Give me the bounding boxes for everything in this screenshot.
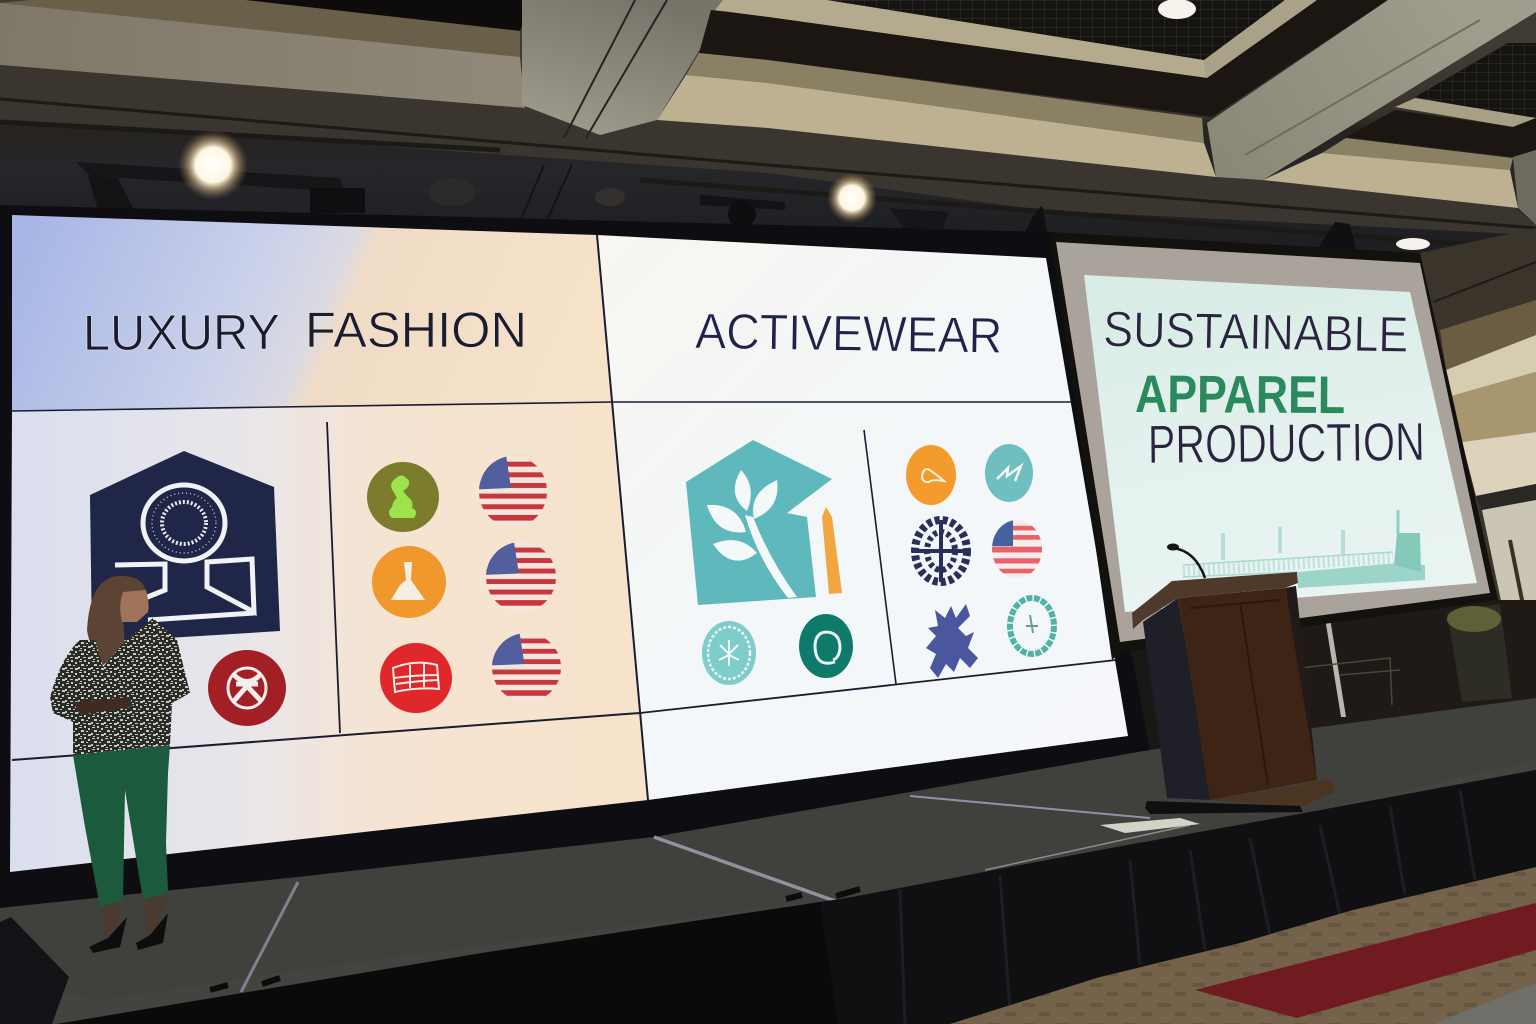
- heading: activewear: ACTIVEWEAR: [695, 303, 1003, 364]
- icon: navy house logo: [90, 451, 280, 642]
- ceiling: [0, 0, 1536, 262]
- face: [120, 590, 149, 622]
- slide skyline illustration: [1183, 510, 1425, 588]
- hair: [87, 576, 146, 665]
- icon: flag circle 3: [492, 633, 561, 702]
- icon: teal ring seal: [1010, 598, 1054, 654]
- slide heading: APPAREL: [1135, 365, 1345, 425]
- ceiling lights: [178, 0, 1460, 339]
- shoes: [89, 913, 168, 953]
- icon: red emblem: [208, 650, 286, 726]
- foreground speaker box: [0, 917, 69, 1024]
- slide heading: PRODUCTION: [1147, 412, 1425, 475]
- trousers: [73, 745, 170, 907]
- heading: luxury fashion: [83, 302, 527, 361]
- stage skirt: [57, 770, 1536, 1024]
- icon: flag circle 2: [486, 542, 556, 612]
- slide heading: SUSTAINABLE: [1103, 301, 1409, 363]
- panel: activewear: [597, 235, 1128, 800]
- icon: blue ornament: [926, 604, 978, 678]
- heading: luxury fashion: FASHION: [305, 302, 527, 358]
- icon: teal oval: [985, 444, 1033, 502]
- stage floor: [0, 698, 1536, 1024]
- carpet and red rug: [950, 867, 1536, 1024]
- icon: olive circle with green tree: [367, 462, 439, 532]
- icon: orange oval: [906, 445, 956, 505]
- panel: luxury fashion: [10, 215, 648, 872]
- icon: dark green circle: [799, 614, 853, 678]
- icon: flag circle 4: [992, 520, 1042, 578]
- LED screen frame: [0, 205, 1150, 908]
- icon: orange circle with white mound: [372, 546, 446, 618]
- icon: red circle with chest sketch: [380, 643, 452, 713]
- heading: luxury fashion: LUXURY: [83, 304, 280, 361]
- slide surface: [1084, 275, 1477, 612]
- dividing lines: luxury: [12, 402, 640, 760]
- slide heading: [1103, 301, 1425, 475]
- icon: teal seal: [702, 621, 756, 685]
- projection screen: [1050, 232, 1498, 660]
- icon: dark knot pattern: [912, 520, 970, 582]
- icon: teal house with leaves: [686, 440, 842, 605]
- icon: flag circle 1: [479, 456, 547, 527]
- jacket: [50, 618, 190, 755]
- hands: [73, 697, 133, 715]
- back wall right: [1290, 228, 1536, 730]
- dividing lines: activewear: [597, 235, 1116, 800]
- speaker presenter: [50, 576, 190, 953]
- calves: [102, 896, 167, 942]
- podium with microphone: [1132, 544, 1335, 814]
